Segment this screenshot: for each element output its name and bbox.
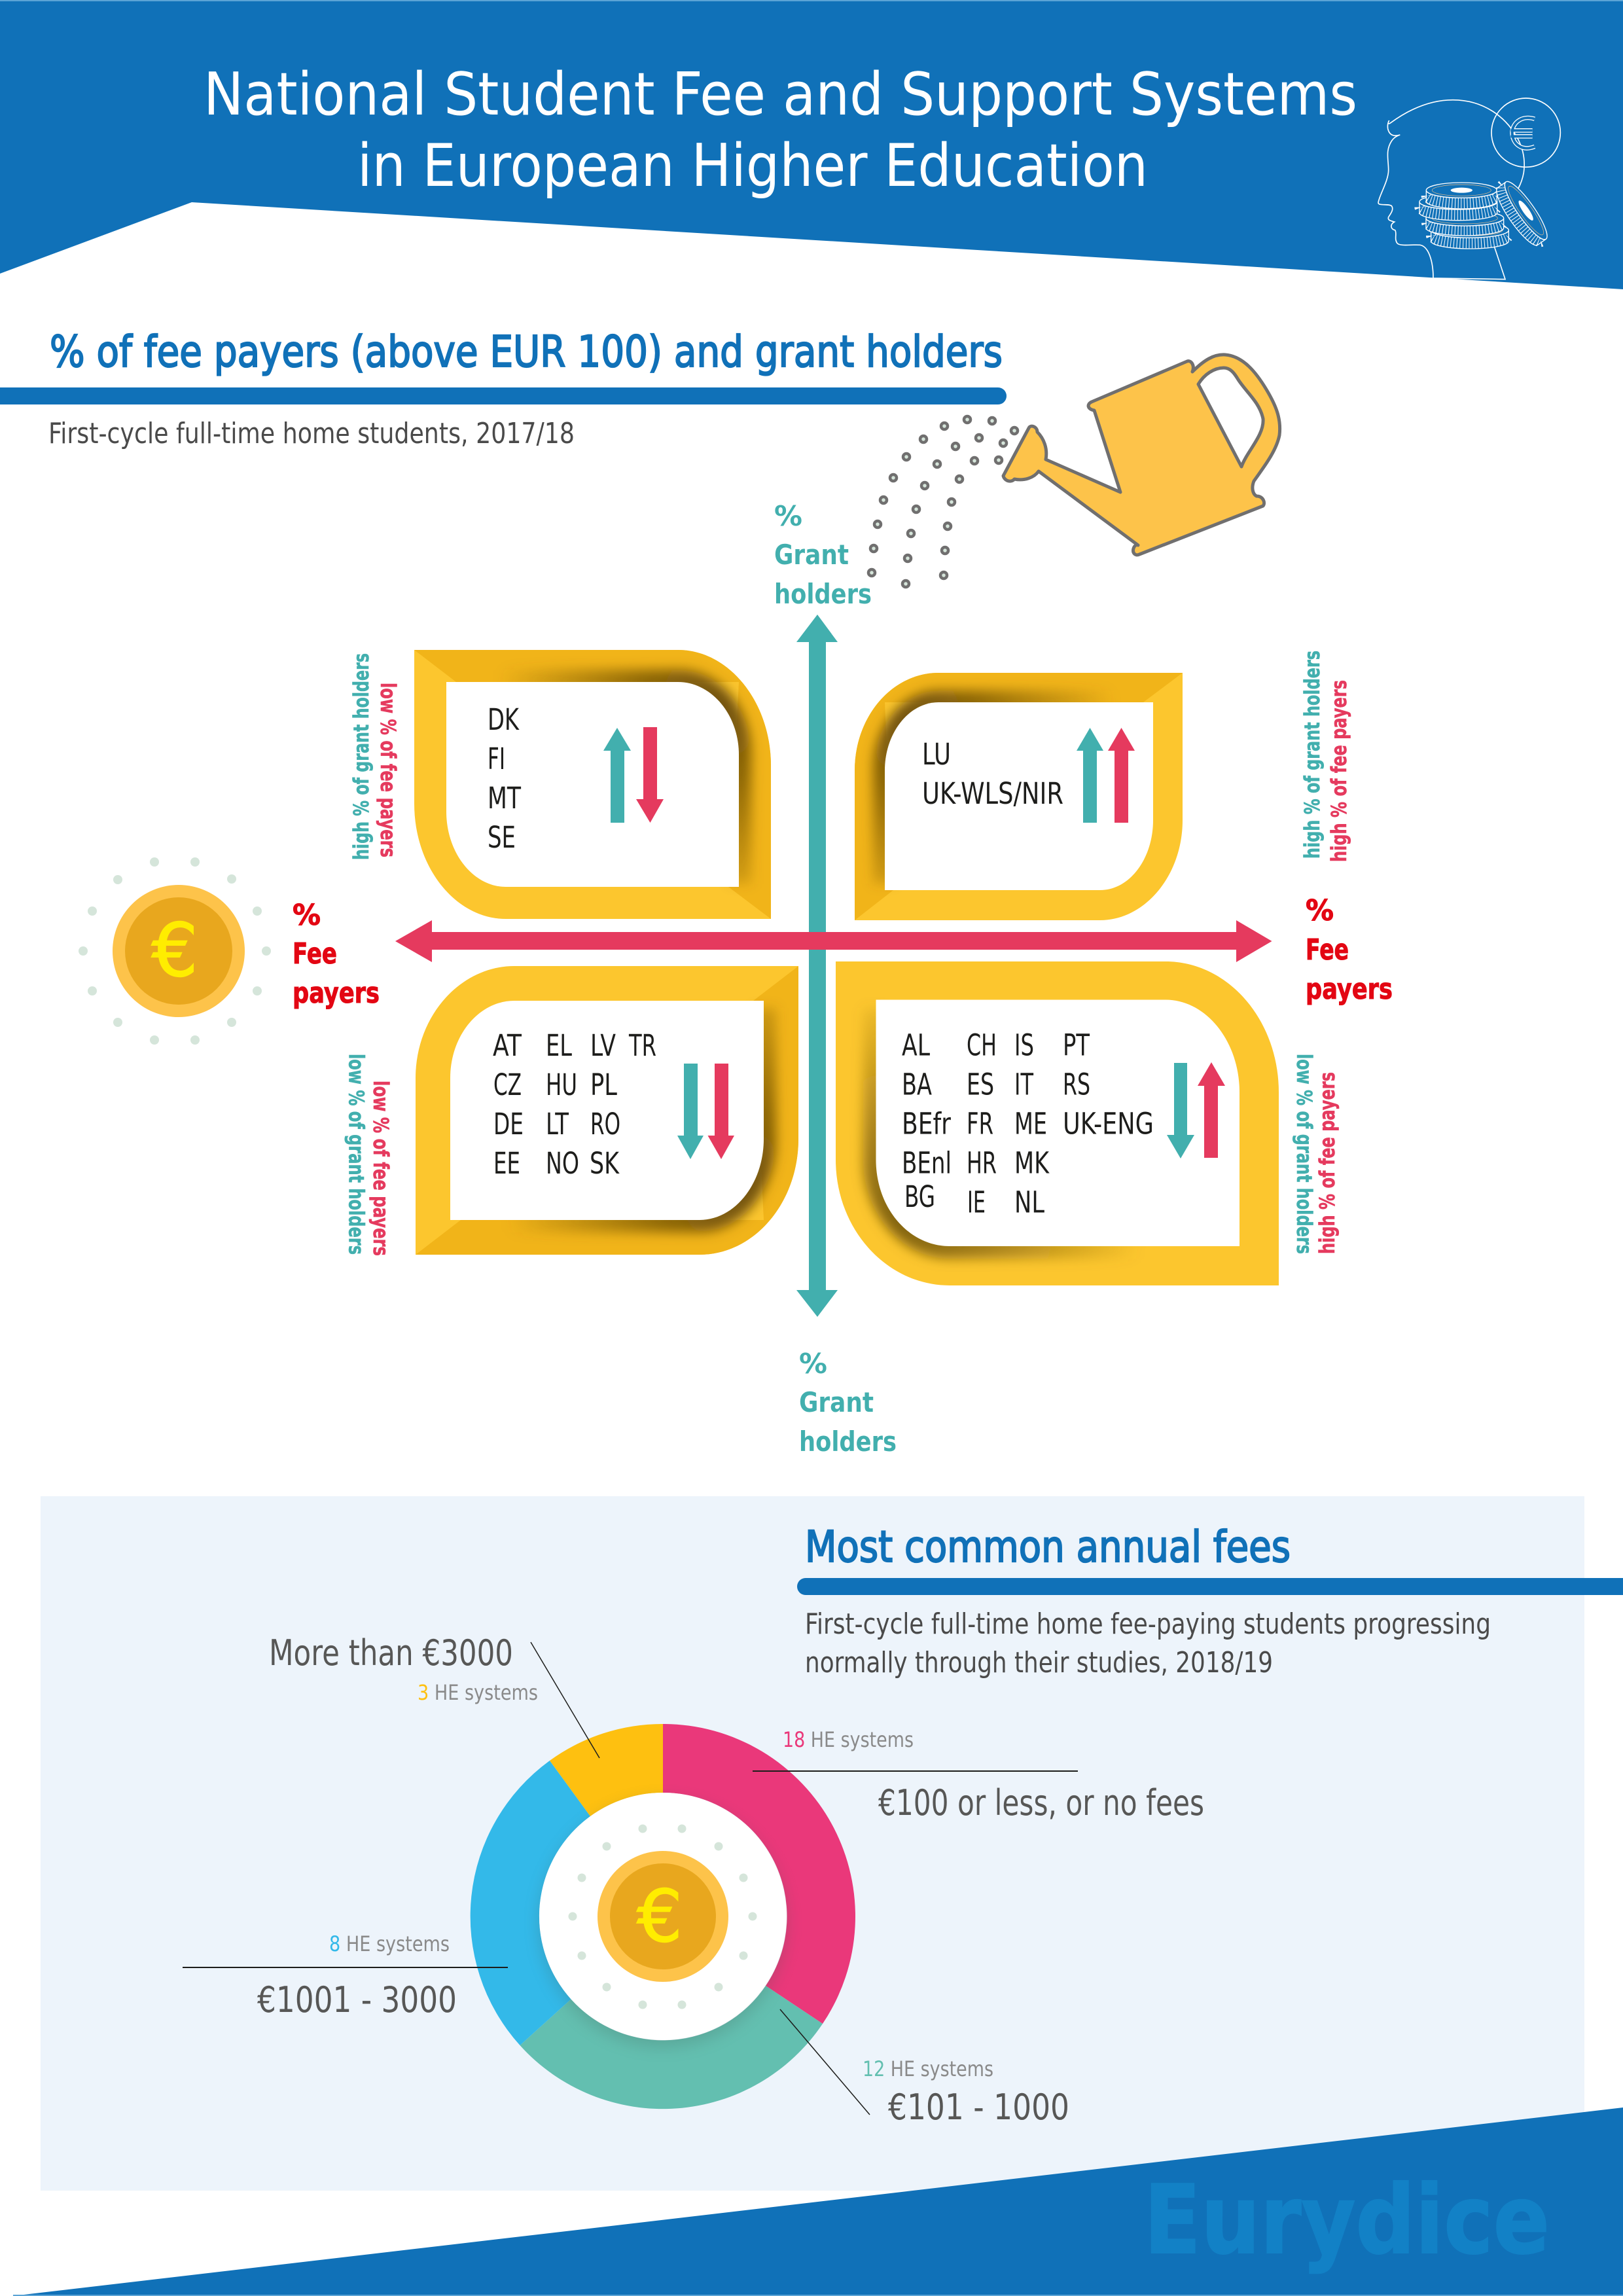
country list: MT — [488, 781, 521, 816]
footer banner — [12, 2108, 1623, 2296]
callout: 1001 to 3000 — [183, 1931, 508, 2020]
country list: ME — [1014, 1106, 1047, 1141]
country list: UK-WLS/NIR — [922, 776, 1063, 811]
country list — [902, 1028, 1154, 1220]
segment: 100 or less — [663, 1724, 855, 2024]
country list: BG — [904, 1179, 935, 1214]
axis label: % fee payers left: % — [293, 899, 321, 932]
side labels: bottom right: low % of grant holders — [1292, 1054, 1317, 1254]
heading bar — [797, 1578, 1623, 1595]
callout: 101 to 1000: 12 HE systems — [863, 2056, 993, 2081]
title — [204, 60, 1357, 200]
heading: fee payers and grant holders: % of fee payers (above EUR 100) and grant holders — [50, 327, 1003, 377]
country list: SE — [488, 820, 516, 855]
axis label: % fee payers right — [1306, 894, 1393, 1006]
icon: watering can — [1003, 355, 1280, 555]
water droplets — [868, 416, 1018, 587]
side labels: top right: high % of grant holders — [1300, 651, 1325, 859]
country list: LV — [590, 1028, 616, 1063]
side labels: top right: high % of fee payers — [1327, 680, 1351, 862]
country list: TR — [628, 1028, 656, 1063]
country list: LT — [546, 1107, 569, 1141]
axis label: % fee payers left: payers — [293, 977, 380, 1010]
callout: 100 or less — [753, 1727, 1204, 1823]
axis label: % fee payers right: Fee — [1306, 933, 1349, 967]
axis label: % fee payers right: % — [1306, 894, 1334, 927]
header banner — [0, 0, 1623, 289]
subtitle: fees section: First-cycle full-time home fee-paying students progressing — [805, 1607, 1491, 1641]
panel: high grants, high fees — [844, 661, 1183, 920]
arrow: grants down — [1167, 1063, 1194, 1158]
axis label: % fee payers left — [293, 899, 380, 1010]
segment: more than 3000 — [550, 1724, 663, 1816]
side labels: top left — [349, 653, 401, 860]
axis arrow: horizontal fee payers — [395, 920, 1272, 962]
country list: FR — [967, 1106, 993, 1141]
country list: ES — [967, 1067, 994, 1102]
country list: PL — [590, 1067, 617, 1102]
country list: HR — [967, 1145, 997, 1181]
axis label: % fee payers left: Fee — [293, 937, 337, 971]
arrow: fees up — [1198, 1062, 1225, 1158]
country list: IE — [967, 1185, 986, 1220]
country list: NO — [546, 1146, 579, 1181]
icon: head with coins and euro — [1378, 98, 1560, 279]
callout: 1001 to 3000: 8 HE systems — [329, 1931, 450, 1956]
arrow: grants up — [1077, 728, 1103, 823]
country list: BEfr — [902, 1106, 951, 1141]
country list — [922, 737, 1063, 811]
callout: 1001 to 3000: €1001 - 3000 — [257, 1979, 457, 2020]
side labels: top left: low % of fee payers — [376, 683, 401, 857]
country list: HU — [546, 1067, 577, 1102]
country list: CZ — [493, 1067, 522, 1102]
country list — [493, 1028, 656, 1181]
country list: FI — [488, 742, 505, 776]
country list: SK — [590, 1146, 620, 1181]
side labels: top right — [1300, 651, 1351, 862]
country list: DK — [488, 702, 520, 737]
axis label: % grant holders top — [774, 500, 872, 610]
axis label: % grant holders top: holders — [774, 578, 872, 610]
callout: more than 3000 — [269, 1632, 599, 1758]
country list: IT — [1014, 1067, 1033, 1102]
callout: 100 or less: 18 HE systems — [783, 1727, 914, 1752]
title: National Student Fee and Support Systems — [204, 60, 1357, 129]
axis label: % fee payers right: payers — [1306, 973, 1393, 1006]
side labels: bottom right — [1292, 1054, 1340, 1254]
title: in European Higher Education — [357, 132, 1148, 200]
country list: UK-ENG — [1063, 1106, 1154, 1141]
callout: 101 to 1000: €101 - 1000 — [888, 2087, 1069, 2128]
icon: euro coin centre: € — [637, 1874, 683, 1958]
panel: low grants, high fees — [836, 961, 1279, 1285]
panel: low grants, low fees — [416, 966, 812, 1263]
callout: 101 to 1000 — [780, 2009, 1069, 2128]
country list: EE — [493, 1146, 520, 1181]
panel: high grants, low fees — [414, 641, 785, 919]
segment: 1001 to 3000 — [471, 1761, 590, 2045]
country list: AL — [902, 1028, 930, 1063]
donut centre — [539, 1793, 787, 2040]
donut chart — [471, 1724, 855, 2109]
country list: RS — [1063, 1067, 1090, 1102]
axis label: % grant holders bottom: % — [799, 1348, 827, 1380]
heading: most common annual fees: Most common annual fees — [805, 1522, 1291, 1572]
arrow: grants up — [603, 728, 631, 823]
callout: 100 or less: €100 or less, or no fees — [878, 1782, 1204, 1823]
subtitle: fees section — [805, 1607, 1491, 1679]
subtitle: fees section: normally through their studies, 2018/19 — [805, 1646, 1273, 1679]
subtitle: first section: First-cycle full-time home students, 2017/18 — [48, 417, 575, 450]
side labels: top left: high % of grant holders — [349, 653, 374, 860]
country list: MK — [1014, 1145, 1050, 1181]
axis label: % grant holders top: % — [774, 500, 802, 532]
country list: NL — [1014, 1185, 1044, 1220]
footer logo text: Eurydice — [1144, 2165, 1550, 2276]
arrow: fees up — [1108, 728, 1135, 823]
country list: LU — [922, 737, 951, 772]
icon: euro coin centre — [568, 1825, 757, 2009]
side labels: bottom right: high % of fee payers — [1315, 1072, 1340, 1254]
axis label: % grant holders top: Grant — [774, 539, 849, 571]
axis label: % grant holders bottom: Grant — [799, 1386, 874, 1418]
arrow: fees down — [708, 1064, 734, 1159]
country list: AT — [493, 1028, 522, 1063]
panel: most common annual fees — [41, 1496, 1584, 2191]
country list: CH — [967, 1028, 997, 1063]
country list: BA — [902, 1067, 932, 1102]
heading bar — [0, 387, 1007, 404]
country list: BEnl — [902, 1145, 952, 1181]
country list: IS — [1014, 1028, 1034, 1063]
country list: PT — [1063, 1028, 1090, 1063]
segment: 101 to 1000 — [520, 1986, 823, 2109]
callout: more than 3000: 3 HE systems — [418, 1680, 538, 1705]
side labels: bottom left — [344, 1054, 393, 1256]
country list — [488, 702, 521, 855]
arrow: fees down — [636, 727, 664, 823]
callout: more than 3000: More than €3000 — [269, 1632, 513, 1674]
icon: euro coin left — [79, 857, 271, 1045]
axis label: % grant holders bottom — [799, 1348, 897, 1458]
country list: EL — [546, 1028, 572, 1063]
side labels: bottom left: low % of grant holders — [344, 1054, 369, 1255]
country list: RO — [590, 1107, 620, 1141]
icon: euro coin left: € — [151, 908, 198, 994]
country list: DE — [493, 1107, 524, 1141]
arrow: grants down — [677, 1064, 704, 1159]
axis label: % grant holders bottom: holders — [799, 1426, 897, 1458]
axis arrow: vertical grant holders — [796, 615, 838, 1317]
side labels: bottom left: low % of fee payers — [368, 1081, 393, 1256]
